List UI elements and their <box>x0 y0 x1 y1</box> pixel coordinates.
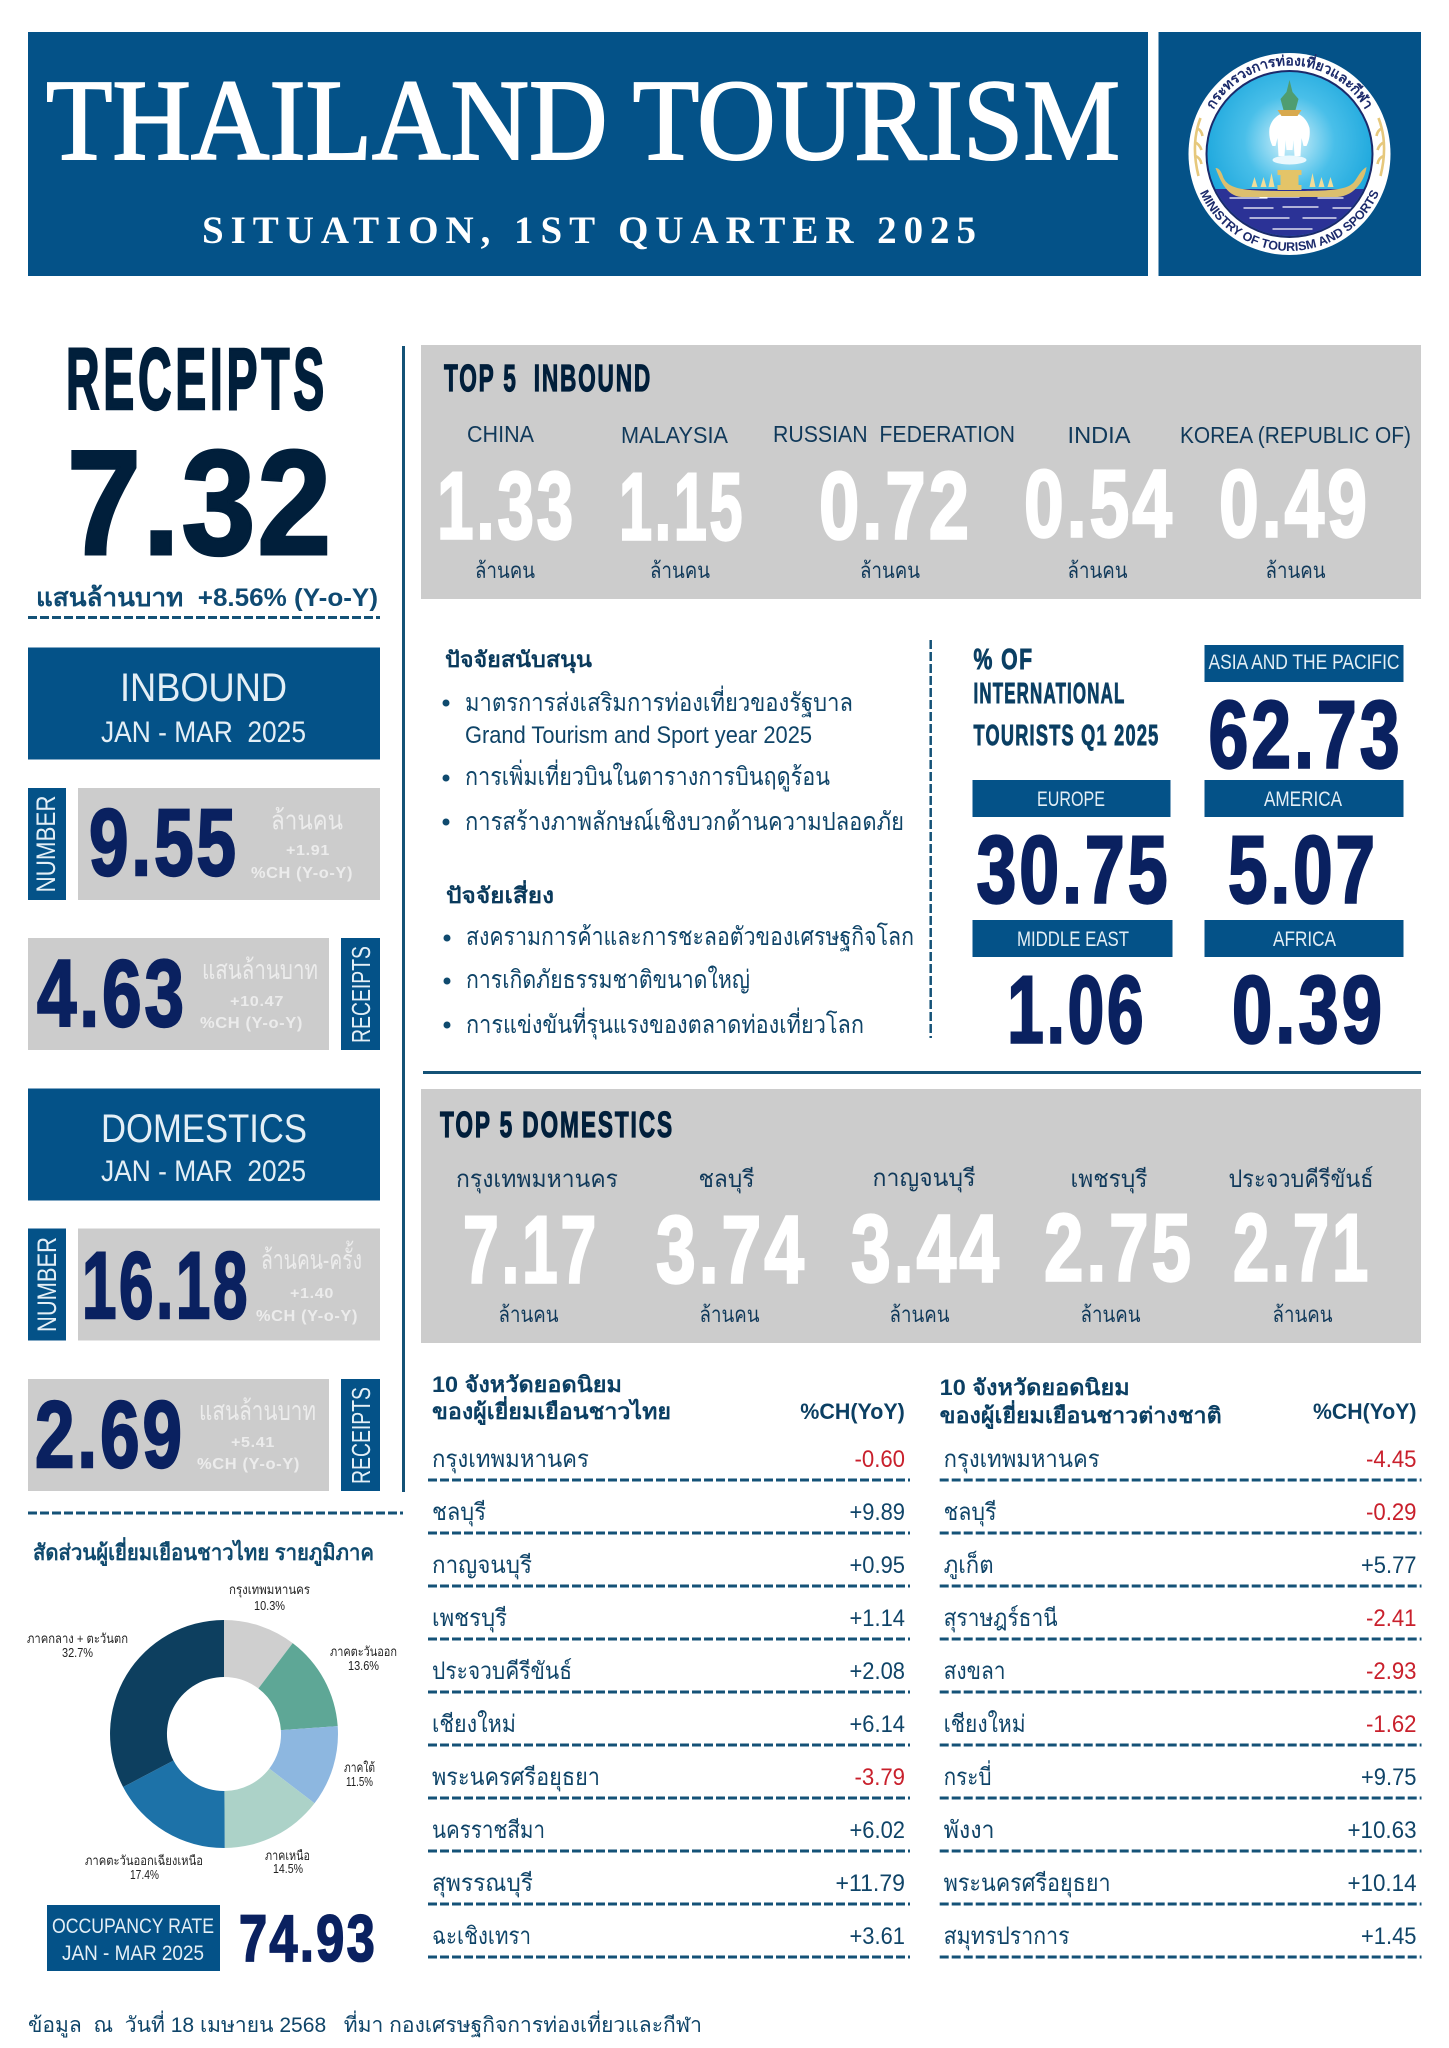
row: Songkhla <box>940 1658 1422 1692</box>
label: Northeast: 17.4% <box>130 1867 159 1882</box>
item: Phetchaburi: 2.75 <box>1044 1194 1194 1302</box>
row: Phuket <box>940 1550 1422 1586</box>
panel: risk factors: สงครามการค้าและการชะลอตัวของเศรษฐกิจโลก <box>466 922 914 951</box>
donut chart <box>110 1620 338 1848</box>
heading: ปัจจัยเสี่ยง <box>446 879 554 908</box>
vertical divider <box>402 346 405 1492</box>
row: Prachuap Khiri Khan: +2.08 <box>850 1658 905 1685</box>
panel: inbound receipts: RECEIPTS <box>346 946 376 1043</box>
row: Chachoengsao <box>428 1923 910 1957</box>
row: Chiang Mai: เชียงใหม่ <box>944 1710 1026 1738</box>
seal text: English: MINISTRY OF TOURISM AND SPORTS <box>1200 190 1378 251</box>
item: Bangkok: กรุงเทพมหานคร <box>456 1166 618 1194</box>
panel: inbound number: 9.55 <box>89 790 239 896</box>
row: Phang Nga: พังงา <box>944 1817 995 1844</box>
table heading: ของผู้เยี่ยมเยือนชาวต่างชาติ <box>940 1399 1222 1430</box>
row: Phang Nga <box>940 1817 1422 1851</box>
heading: TOP 5 INBOUND <box>444 358 652 400</box>
row: Chiang Mai <box>940 1710 1422 1745</box>
item: Prachuap Khiri Khan: ล้านคน <box>1272 1302 1332 1327</box>
panel: domestics number: %CH (Y-o-Y) <box>256 1308 358 1325</box>
panel: share of international tourists by region <box>972 644 1404 1064</box>
item: China: ล้านคน <box>475 558 535 583</box>
item: India: INDIA <box>1068 422 1131 448</box>
row: Surat Thani: สุราษฎร์ธานี <box>944 1604 1058 1633</box>
panel: inbound number: %CH (Y-o-Y) <box>251 865 353 882</box>
row: Chonburi <box>940 1499 1422 1533</box>
panel: top 5 inbound <box>421 345 1421 599</box>
panel: occupancy rate: 74.93 <box>239 1901 377 1975</box>
panel: domestics receipts: แสนล้านบาท <box>199 1396 316 1426</box>
big number: 7.32 <box>67 419 333 586</box>
label: Central and West: ภาคกลาง + ตะวันตก <box>27 1631 128 1646</box>
panel: inbound number <box>28 788 380 900</box>
item: Phetchaburi <box>1044 1166 1194 1327</box>
title: THAILAND TOURISM <box>46 57 1120 185</box>
item: Chonburi <box>656 1166 807 1327</box>
row: Prachuap Khiri Khan <box>428 1657 910 1692</box>
row: Kanchanaburi: กาญจนบุรี <box>432 1552 532 1580</box>
footer source note: ข้อมูล ณ วันที่ 18 เมษายน 2568 ที่มา กองเศรษฐกิจการท่องเที่ยวและกีฬา <box>28 2010 702 2038</box>
item: Bangkok: ล้านคน <box>498 1302 558 1327</box>
table heading <box>432 1372 905 1426</box>
region: Middle East: MIDDLE EAST <box>1017 928 1129 951</box>
panel: domestics header: JAN - MAR 2025 <box>101 1155 306 1188</box>
item: Prachuap Khiri Khan <box>1228 1165 1374 1327</box>
row: Ayutthaya <box>940 1870 1422 1904</box>
row: Bangkok <box>940 1446 1422 1480</box>
row: Bangkok: กรุงเทพมหานคร <box>432 1446 589 1474</box>
region: Asia and the Pacific: ASIA AND THE PACIFIC <box>1208 651 1400 674</box>
heading <box>974 644 1160 752</box>
table heading: %CH(YoY) <box>800 1399 905 1424</box>
table: top 10 provinces, foreign visitors <box>940 1375 1422 1957</box>
row: Songkhla: -2.93 <box>1366 1658 1416 1685</box>
row: Suphan Buri: +11.79 <box>836 1870 905 1897</box>
chart title: สัดส่วนผู้เยี่ยมเยือนชาวไทย รายภูมิภาค <box>33 1536 374 1567</box>
row: Chonburi: -0.29 <box>1366 1499 1416 1526</box>
row: Samut Prakan: สมุทรปราการ <box>944 1923 1070 1951</box>
panel: regional share donut chart <box>27 1536 397 1882</box>
item: Phetchaburi: ล้านคน <box>1080 1302 1140 1327</box>
row: Kanchanaburi <box>428 1552 910 1586</box>
label: Northeast <box>85 1853 203 1882</box>
panel: occupancy rate: OCCUPANCY RATE <box>52 1915 214 1938</box>
panel: risk factors <box>444 879 914 1040</box>
panel: inbound number: ล้านคน <box>271 806 343 836</box>
item: Bangkok: 7.17 <box>463 1196 599 1304</box>
row: Prachuap Khiri Khan: ประจวบคีรีขันธ์ <box>432 1657 572 1685</box>
panel: inbound header: JAN - MAR 2025 <box>101 716 306 749</box>
item: Bangkok <box>456 1166 618 1327</box>
label: Bangkok: 10.3% <box>254 1598 285 1613</box>
item: Kanchanaburi: ล้านคน <box>890 1302 950 1327</box>
panel: domestics receipts <box>28 1379 380 1491</box>
panel: domestics number: +1.40 <box>290 1285 334 1302</box>
heading: RECEIPTS <box>66 331 328 428</box>
label: Northeast: ภาคตะวันออกเฉียงเหนือ <box>85 1853 203 1868</box>
item: Russian Federation: 0.72 <box>819 452 972 560</box>
region: America: AMERICA <box>1264 788 1342 811</box>
heading: INTERNATIONAL <box>974 678 1126 710</box>
item: Russian Federation: ล้านคน <box>860 558 920 583</box>
panel: inbound receipts: %CH (Y-o-Y) <box>200 1015 303 1032</box>
panel: domestics receipts: RECEIPTS <box>346 1387 376 1484</box>
row: Suphan Buri: สุพรรณบุรี <box>432 1870 533 1898</box>
row: Bangkok: กรุงเทพมหานคร <box>944 1446 1100 1474</box>
row: Songkhla: สงขลา <box>944 1658 1006 1685</box>
panel: inbound receipts: แสนล้านบาท <box>202 955 318 985</box>
row: Chonburi: +9.89 <box>850 1499 905 1526</box>
panel: inbound number: NUMBER <box>31 796 61 892</box>
row: Suphan Buri <box>428 1870 910 1904</box>
panel: domestics receipts: %CH (Y-o-Y) <box>197 1456 300 1473</box>
row: Phetchaburi: +1.14 <box>850 1605 905 1632</box>
heading: TOP 5 DOMESTICS <box>440 1104 674 1145</box>
region: Middle East: 1.06 <box>1007 956 1146 1064</box>
panel: support factors: มาตรการส่งเสริมการท่องเที่ยวของรัฐบาล <box>465 685 853 717</box>
region: Europe: EUROPE <box>1037 788 1105 811</box>
panel: inbound number: +1.91 <box>286 842 330 859</box>
row: Samut Prakan: +1.45 <box>1361 1923 1416 1950</box>
row: Surat Thani: -2.41 <box>1366 1605 1416 1632</box>
heading: ปัจจัยสนับสนุน <box>445 647 592 674</box>
row: Phang Nga: +10.63 <box>1348 1817 1416 1844</box>
panel: top 5 domestics <box>421 1089 1421 1343</box>
panel: domestics number: NUMBER <box>32 1237 62 1332</box>
label: North: 14.5% <box>273 1861 303 1876</box>
region: Africa <box>1204 920 1404 1064</box>
region: Africa: AFRICA <box>1273 928 1336 951</box>
heading: % OF <box>974 644 1034 676</box>
row: Chiang Mai: +6.14 <box>850 1711 905 1738</box>
item: Chonburi: 3.74 <box>656 1196 807 1304</box>
header banner <box>28 32 1148 276</box>
row: Nakhon Ratchasima <box>428 1817 910 1851</box>
panel: domestics number: ล้านคน-ครั้ง <box>261 1240 362 1275</box>
row: Ayutthaya: -3.79 <box>854 1764 905 1791</box>
item: Prachuap Khiri Khan: 2.71 <box>1233 1194 1371 1302</box>
row: Chachoengsao: +3.61 <box>850 1923 905 1950</box>
icon: ministry seal <box>1188 53 1390 255</box>
table heading: 10 จังหวัดยอดนิยม <box>940 1375 1130 1400</box>
item: Korea: KOREA (REPUBLIC OF) <box>1180 422 1411 448</box>
item: Russian Federation <box>773 421 1015 583</box>
row: Chachoengsao: ฉะเชิงเทรา <box>432 1923 531 1950</box>
table heading: ของผู้เยี่ยมเยือนชาวไทย <box>432 1395 671 1426</box>
row: Krabi: +9.75 <box>1361 1764 1416 1791</box>
item: Prachuap Khiri Khan: ประจวบคีรีขันธ์ <box>1228 1165 1374 1193</box>
item: Malaysia <box>619 422 745 583</box>
item: Malaysia: MALAYSIA <box>621 422 729 448</box>
row: Krabi: กระบี่ <box>944 1760 992 1791</box>
row: Ayutthaya <box>428 1764 910 1798</box>
row: Bangkok: -4.45 <box>1366 1446 1416 1473</box>
item: China: 1.33 <box>437 452 576 560</box>
row: Chiang Mai <box>428 1710 910 1745</box>
label: South: ภาคใต้ <box>344 1760 375 1775</box>
logo panel <box>1158 32 1421 276</box>
item: Korea: 0.49 <box>1219 450 1370 558</box>
panel: occupancy rate <box>47 1901 377 1975</box>
item: India <box>1024 422 1175 583</box>
label: Bangkok <box>229 1582 310 1613</box>
label: East: 13.6% <box>348 1658 379 1673</box>
label: South: 11.5% <box>346 1774 373 1789</box>
item: India: ล้านคน <box>1068 558 1128 583</box>
region: Asia and the Pacific <box>1204 645 1404 788</box>
panel: inbound receipts: 4.63 <box>37 941 187 1047</box>
item: Kanchanaburi <box>851 1165 1002 1327</box>
panel: inbound receipts <box>28 938 380 1050</box>
seal text: Thai: กระทรวงการท่องเที่ยวและกีฬา <box>1208 54 1371 110</box>
item: China: CHINA <box>467 421 535 447</box>
heading: TOURISTS Q1 2025 <box>974 720 1160 752</box>
label: Central and West: 32.7% <box>62 1645 93 1660</box>
item: Kanchanaburi: 3.44 <box>851 1196 1002 1302</box>
label: East: ภาคตะวันออก <box>330 1644 397 1659</box>
row: Nakhon Ratchasima: +6.02 <box>850 1817 905 1844</box>
region: America: 5.07 <box>1228 816 1378 924</box>
label: Central and West <box>27 1631 128 1660</box>
row: Bangkok <box>428 1446 910 1480</box>
item: Chonburi: ล้านคน <box>700 1302 760 1327</box>
item: Phetchaburi: เพชรบุรี <box>1070 1166 1148 1194</box>
table heading: 10 จังหวัดยอดนิยม <box>432 1372 622 1397</box>
row: Kanchanaburi: +0.95 <box>850 1552 905 1579</box>
row: Chonburi: ชลบุรี <box>944 1499 997 1527</box>
row: Phuket: ภูเก็ต <box>944 1550 994 1580</box>
region: Africa: 0.39 <box>1232 956 1385 1064</box>
table: top 10 provinces, Thai visitors <box>428 1372 910 1957</box>
label: North: ภาคเหนือ <box>265 1848 310 1863</box>
region: Europe: 30.75 <box>976 816 1170 924</box>
panel: support factors <box>442 647 904 836</box>
panel: domestics header <box>28 1088 380 1200</box>
row: Samut Prakan <box>940 1923 1422 1957</box>
panel: domestics receipts: 2.69 <box>35 1382 185 1488</box>
row: Phuket: +5.77 <box>1361 1552 1416 1579</box>
item: Kanchanaburi: กาญจนบุรี <box>872 1165 976 1193</box>
item: Korea: ล้านคน <box>1266 558 1326 583</box>
region: Europe <box>972 780 1170 924</box>
item: India: 0.54 <box>1024 450 1175 558</box>
row: Surat Thani <box>940 1604 1422 1639</box>
panel: inbound receipts: +10.47 <box>230 993 284 1010</box>
row: Chiang Mai: เชียงใหม่ <box>432 1710 516 1738</box>
table heading <box>940 1375 1416 1430</box>
region: Middle East <box>972 920 1172 1064</box>
item: Malaysia: ล้านคน <box>650 558 710 583</box>
row: Chonburi: ชลบุรี <box>432 1499 486 1527</box>
subtitle: SITUATION, 1ST QUARTER 2025 <box>202 209 976 252</box>
row: Chiang Mai: -1.62 <box>1366 1711 1416 1738</box>
row: Ayutthaya: +10.14 <box>1348 1870 1416 1897</box>
panel: domestics number <box>28 1228 380 1340</box>
row: Chonburi <box>428 1499 910 1533</box>
label: Bangkok: กรุงเทพมหานคร <box>229 1582 310 1598</box>
panel: inbound header <box>28 648 380 760</box>
panel: domestics header: DOMESTICS <box>101 1107 307 1151</box>
panel: risk factors: การเกิดภัยธรรมชาติขนาดใหญ่ <box>466 965 750 994</box>
table heading: %CH(YoY) <box>1313 1399 1416 1424</box>
region: America <box>1204 780 1404 924</box>
panel: support factors: การเพิ่มเที่ยวบินในตารางการบินฤดูร้อน <box>465 759 830 792</box>
panel: inbound header: INBOUND <box>120 666 287 710</box>
item: China <box>437 421 576 583</box>
row: Nakhon Ratchasima: นครราชสีมา <box>432 1817 545 1844</box>
label: South <box>344 1760 375 1789</box>
row: Ayutthaya: พระนครศรีอยุธยา <box>432 1764 600 1792</box>
panel: support factors: Grand Tourism and Sport year 2025 <box>465 722 812 749</box>
panel: domestics number: 16.18 <box>82 1233 250 1339</box>
label: North <box>265 1848 310 1876</box>
panel: domestics receipts: +5.41 <box>231 1434 275 1451</box>
panel: total receipts <box>28 331 380 618</box>
row: Bangkok: -0.60 <box>854 1446 905 1473</box>
receipts unit and change: แสนล้านบาท +8.56% (Y-o-Y) <box>36 584 378 612</box>
panel: support factors: การสร้างภาพลักษณ์เชิงบวกด้านความปลอดภัย <box>465 808 904 836</box>
row: Krabi <box>940 1760 1422 1798</box>
label: East <box>330 1644 397 1673</box>
row: Ayutthaya: พระนครศรีอยุธยา <box>944 1870 1111 1898</box>
item: Malaysia: 1.15 <box>619 454 745 560</box>
row: Phetchaburi: เพชรบุรี <box>432 1605 507 1633</box>
row: Phetchaburi <box>428 1605 910 1639</box>
item: Chonburi: ชลบุรี <box>698 1166 755 1194</box>
panel: risk factors: การแข่งขันที่รุนแรงของตลาดท่องเที่ยวโลก <box>466 1007 864 1040</box>
item: Korea <box>1180 422 1411 583</box>
panel: occupancy rate: JAN - MAR 2025 <box>62 1942 204 1965</box>
item: Russian Federation: RUSSIAN FEDERATION <box>773 421 1015 447</box>
